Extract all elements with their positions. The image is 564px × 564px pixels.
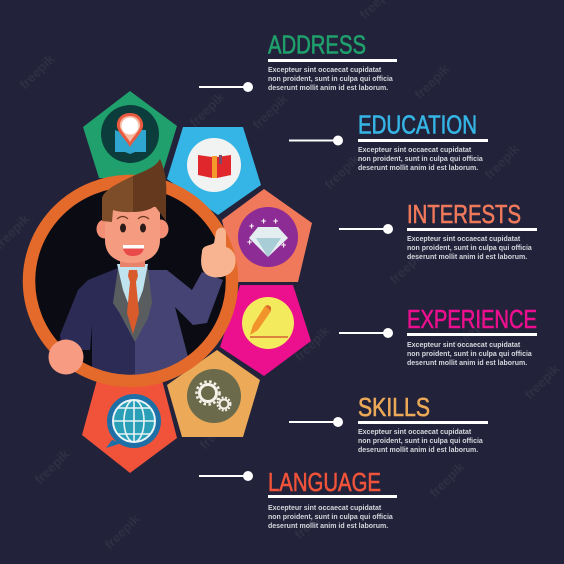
section: education (289, 112, 488, 172)
panel: interests pentagon (222, 189, 312, 282)
body text: deserunt mollit anim id est laborum. (407, 254, 527, 261)
body text (358, 147, 483, 172)
heading: LANGUAGE (268, 469, 381, 497)
right hand pointing (201, 228, 236, 277)
heading: SKILLS (358, 394, 430, 422)
section: interests (339, 201, 537, 261)
icon: diamond (247, 216, 288, 257)
section: experience (339, 306, 537, 367)
icon: book (198, 155, 231, 178)
icon: gears (196, 382, 230, 410)
panel: education pentagon (167, 127, 261, 215)
text: freepik (250, 91, 291, 132)
body text: non proident, sunt in culpa qui officia (407, 245, 532, 252)
text: freepik (522, 361, 563, 402)
body text (358, 429, 483, 454)
connector (199, 82, 253, 92)
text: freepik (427, 459, 468, 500)
text: freepik (102, 511, 143, 552)
icon: diamond: + (273, 216, 278, 226)
orange ring (29, 181, 232, 381)
hair (102, 159, 166, 222)
text: freepik (322, 151, 363, 192)
body text: Excepteur sint occaecat cupidatat (268, 67, 382, 74)
panel: experience pentagon (220, 285, 311, 376)
icon: diamond: + (281, 240, 286, 250)
text: freepik (387, 246, 428, 287)
section: address (199, 32, 397, 92)
heading: ADDRESS (268, 32, 366, 60)
mouth (123, 248, 144, 256)
icon: diamond: + (247, 237, 252, 247)
body text: deserunt mollit anim id est laborum. (407, 360, 527, 367)
body text: non proident, sunt in culpa qui officia (407, 351, 532, 358)
text: freepik (197, 411, 238, 452)
body text (268, 67, 393, 92)
body text: non proident, sunt in culpa qui officia (268, 514, 393, 521)
body text: Excepteur sint occaecat cupidatat (358, 429, 472, 436)
panel: skills pentagon (167, 350, 260, 437)
eyes (120, 224, 126, 232)
body text: deserunt mollit anim id est laborum. (268, 523, 388, 530)
section: language (199, 469, 397, 530)
body text: deserunt mollit anim id est laborum. (268, 85, 388, 92)
body text: deserunt mollit anim id est laborum. (358, 447, 478, 454)
body text: Excepteur sint occaecat cupidatat (407, 236, 521, 243)
panel: address pentagon (83, 91, 177, 178)
body text: Excepteur sint occaecat cupidatat (407, 342, 521, 349)
body text: non proident, sunt in culpa qui officia (268, 76, 393, 83)
text: freepik (187, 89, 228, 130)
body text: deserunt mollit anim id est laborum. (358, 165, 478, 172)
icon: map pin (115, 113, 146, 154)
icon: pen (250, 305, 288, 337)
left hand (48, 340, 84, 374)
jacket (60, 264, 223, 385)
heading: INTERESTS (407, 201, 521, 229)
connector (339, 328, 393, 338)
icon: globe speech bubble (106, 394, 161, 448)
body text: non proident, sunt in culpa qui officia (358, 438, 483, 445)
inner dark disc (34, 186, 226, 376)
text: freepik (17, 51, 58, 92)
icon: diamond: + (261, 216, 266, 226)
body text (268, 505, 393, 530)
connector (289, 136, 343, 146)
connector (289, 417, 343, 427)
text: freepik (32, 446, 73, 487)
text: freepik (482, 141, 523, 182)
body text: Excepteur sint occaecat cupidatat (358, 147, 472, 154)
text: freepik (292, 501, 333, 542)
panel: language pentagon (82, 380, 177, 473)
body text: Excepteur sint occaecat cupidatat (268, 505, 382, 512)
body text (407, 236, 532, 261)
icon: diamond: + (249, 221, 254, 231)
section: skills (289, 394, 488, 454)
illustration: businessman in ring (29, 159, 236, 385)
connector (199, 471, 253, 481)
head (96, 159, 168, 267)
text: freepik (452, 311, 493, 352)
text: freepik (292, 323, 333, 364)
connector (339, 224, 393, 234)
text: freepik (412, 61, 453, 102)
heading: EDUCATION (358, 112, 477, 140)
body text (407, 342, 532, 367)
body text: non proident, sunt in culpa qui officia (358, 156, 483, 163)
